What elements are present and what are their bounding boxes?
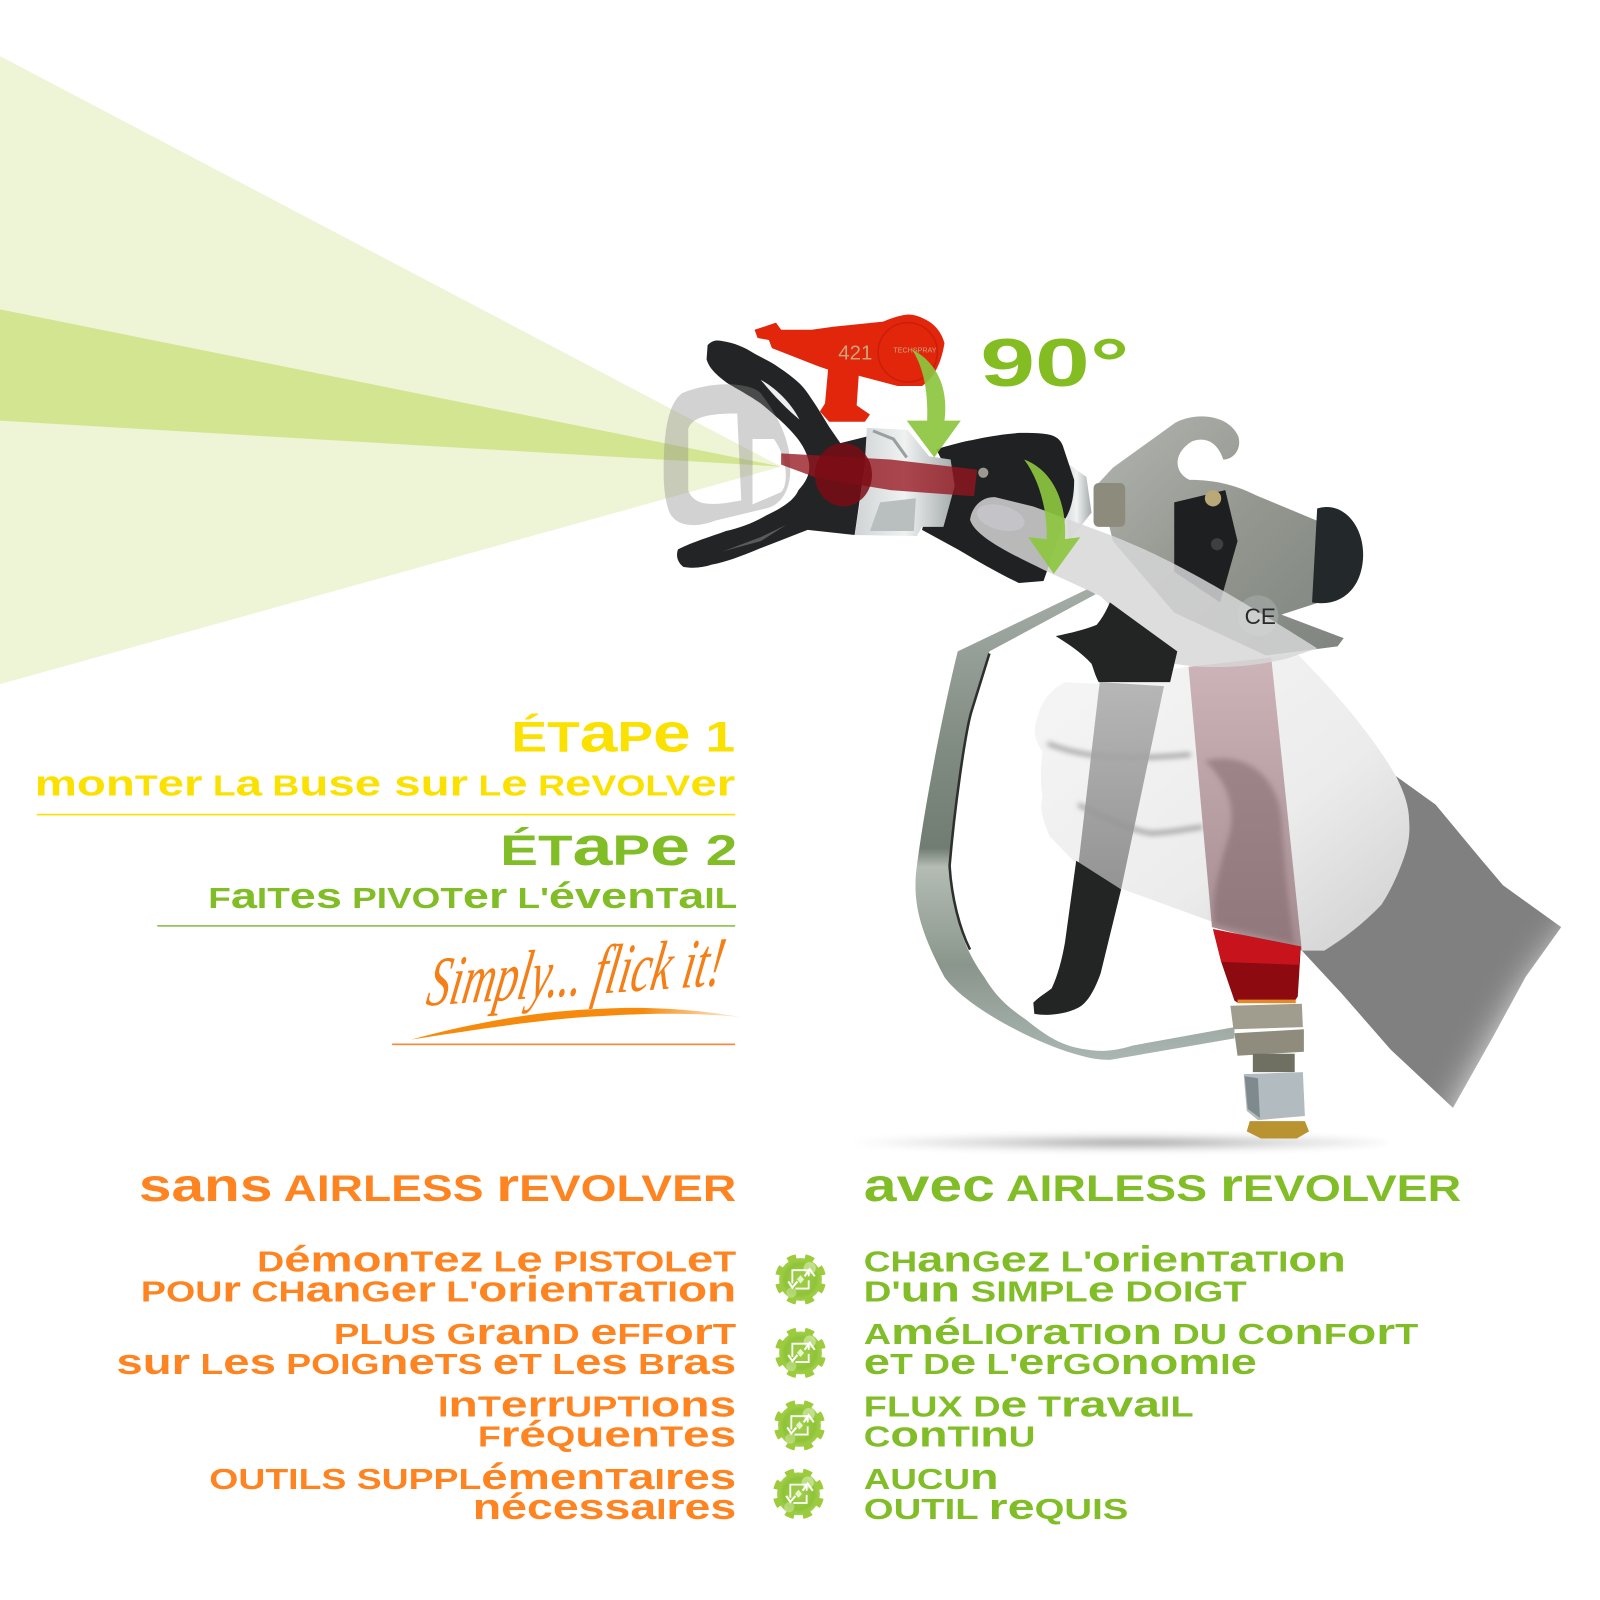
hex bolt — [1094, 483, 1125, 527]
column heading: with: avec AIRLESS rEVOLVER — [864, 1159, 1461, 1211]
list: with: FLUX D e Trava IL — [864, 1384, 1194, 1425]
list: without: Fré Quen Tes — [478, 1413, 736, 1454]
rear knob — [1312, 507, 1363, 603]
black housing — [922, 433, 1074, 583]
fluid fitting — [1213, 929, 1309, 1138]
icon: gear 4 — [776, 1471, 821, 1516]
finger — [970, 497, 1317, 667]
CE plate — [1238, 595, 1278, 636]
arrow: nozzle turn — [907, 349, 961, 457]
ground shadow — [817, 1133, 1389, 1152]
step 1 description: mon Ter La Buse sur Le ReVOLV er — [35, 762, 735, 803]
spray gun: 421 — [838, 342, 872, 364]
list: with: D' un SIMPL e DOIGT — [864, 1268, 1247, 1309]
trigger — [1033, 602, 1177, 1015]
hand and sleeve — [970, 497, 1600, 1154]
icon: gear 3 — [777, 1403, 822, 1448]
arrow: finger flick — [1024, 459, 1080, 574]
fist — [1035, 653, 1409, 951]
slogan: Simply... flick it! — [422, 923, 731, 1022]
chrome nut — [855, 428, 955, 536]
step 2 heading: ÉT aPe 2 — [500, 816, 737, 877]
green rotation arrows — [907, 349, 1080, 574]
list: with: CH an Gez L' orien TaTIon — [864, 1239, 1346, 1280]
list: without: PLUS G ran D eFF or T — [334, 1311, 737, 1352]
list: with: Amé LIO ra TIon DU C on For T — [864, 1311, 1419, 1352]
list: with: OUTIL re QUIS — [864, 1486, 1128, 1527]
spray gun — [664, 314, 1363, 1060]
list: without: POU r CH an Ger L' orien TaTIon — [141, 1268, 736, 1309]
grip seen through — [1078, 682, 1164, 889]
list: with — [864, 1239, 1419, 1527]
list: without: nécessa Ires — [473, 1486, 736, 1527]
list: without: Démon Tez Le PISTOL eT — [257, 1239, 737, 1280]
column heading: without: sans AIRLESS rEVOLVER — [139, 1159, 736, 1211]
gun body — [1099, 416, 1344, 656]
list: without: In Terr UPTI ons — [438, 1384, 736, 1425]
red tip key — [755, 314, 944, 422]
list: without: sur Les POIG ne TS eT L es Bras — [116, 1341, 736, 1382]
tip guard — [677, 341, 869, 568]
collar — [1062, 459, 1092, 541]
list: without — [116, 1239, 737, 1527]
icon: gear 1 — [778, 1257, 823, 1302]
sleeve — [1302, 776, 1561, 1108]
CE mark: CE — [1245, 604, 1276, 629]
list: with: Con TInU — [864, 1413, 1035, 1454]
step 1 heading: ÉT aPe 1 — [512, 702, 735, 763]
spray fan — [0, 56, 781, 684]
list: without: OUTILS SUPPL émen TaIres — [209, 1456, 736, 1497]
icon: gear 2 — [778, 1330, 823, 1375]
list: with: AUCU n — [864, 1456, 999, 1497]
90 degree label: 90° — [980, 326, 1129, 401]
gear icons — [776, 1257, 823, 1516]
list: with: eT D e L' er GO nom Ie — [864, 1341, 1257, 1382]
ghost guard — [664, 384, 790, 525]
step 2 description: FaITes PIVOT er L' éven TaIL — [208, 875, 737, 916]
see-through red barrel — [781, 453, 977, 496]
guard loop — [915, 589, 1234, 1060]
spray gun: TECHSPRAY — [893, 346, 937, 354]
slogan — [411, 923, 740, 1039]
